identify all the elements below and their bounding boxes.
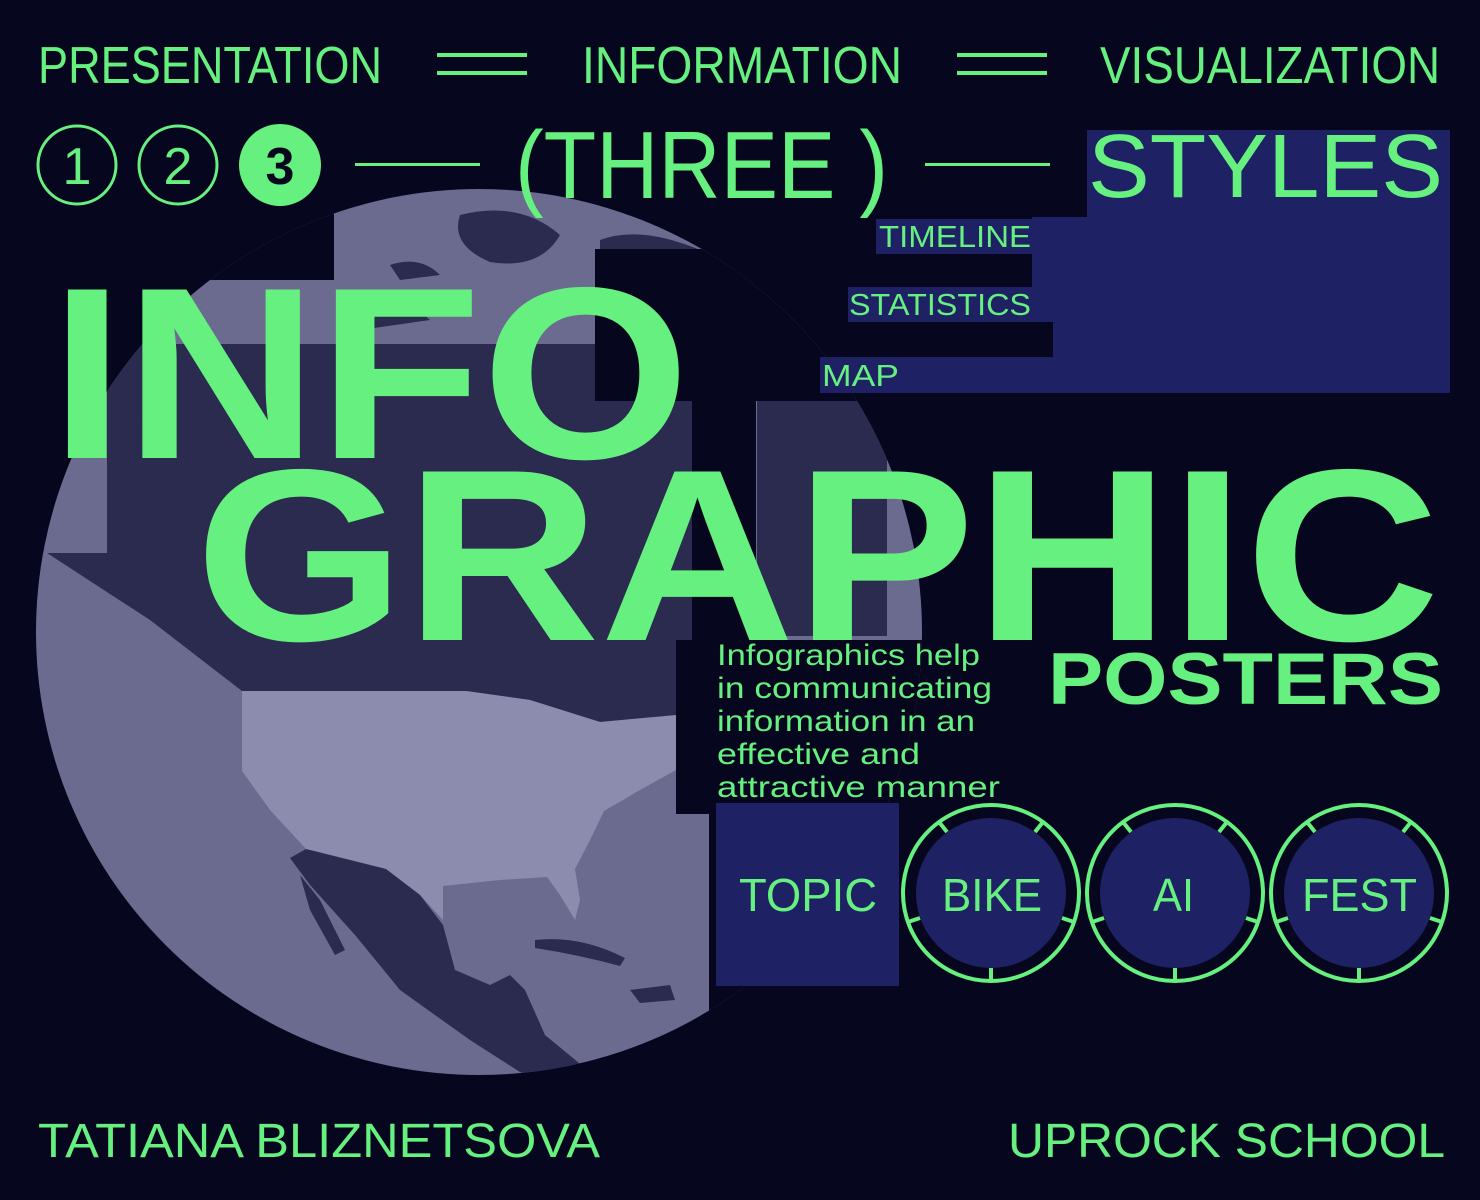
- number circles: 1: [63, 138, 91, 196]
- globe map: [36, 189, 922, 1075]
- footer: UPROCK SCHOOL: [1008, 1115, 1445, 1168]
- number circles: 3: [266, 138, 294, 196]
- topic box: TOPIC: [739, 869, 877, 921]
- topic wheels: FEST: [1302, 869, 1417, 921]
- styles panel: MAP: [822, 358, 899, 393]
- main title: POSTERS: [1048, 639, 1443, 720]
- canada dark land: [47, 344, 692, 722]
- top row: PRESENTATION: [38, 37, 382, 95]
- three heading: [355, 112, 1050, 219]
- top row: INFORMATION: [582, 37, 902, 95]
- three heading: (THREE ): [515, 112, 888, 219]
- main title: INFO: [50, 236, 690, 510]
- description: attractive manner: [717, 771, 1000, 804]
- topic box: [716, 803, 899, 986]
- description: in communicating: [717, 672, 992, 705]
- topic wheels: BIKE: [942, 869, 1042, 921]
- USA: [242, 691, 676, 920]
- description: effective and: [717, 738, 920, 771]
- styles panel: TIMELINE: [879, 219, 1031, 254]
- styles panel: STYLES: [1088, 117, 1443, 217]
- description: information in an: [717, 705, 975, 738]
- number circles: 2: [164, 138, 192, 196]
- description: [717, 639, 1000, 804]
- top row: VISUALIZATION: [1100, 37, 1440, 95]
- main title: GRAPHIC: [195, 418, 1440, 692]
- topic wheels: AI: [1153, 869, 1194, 921]
- footer: TATIANA BLIZNETSOVA: [38, 1115, 600, 1168]
- styles panel: [820, 117, 1450, 393]
- main title: [50, 236, 1443, 720]
- number circles: [38, 124, 321, 206]
- greenland islands: [458, 210, 560, 263]
- footer: [38, 1115, 1445, 1168]
- styles panel: STATISTICS: [849, 287, 1031, 322]
- topic wheels: [903, 805, 1447, 981]
- masks: [210, 214, 334, 280]
- mexico: [290, 849, 585, 1090]
- top row: [38, 37, 1440, 95]
- description: Infographics help: [717, 639, 980, 672]
